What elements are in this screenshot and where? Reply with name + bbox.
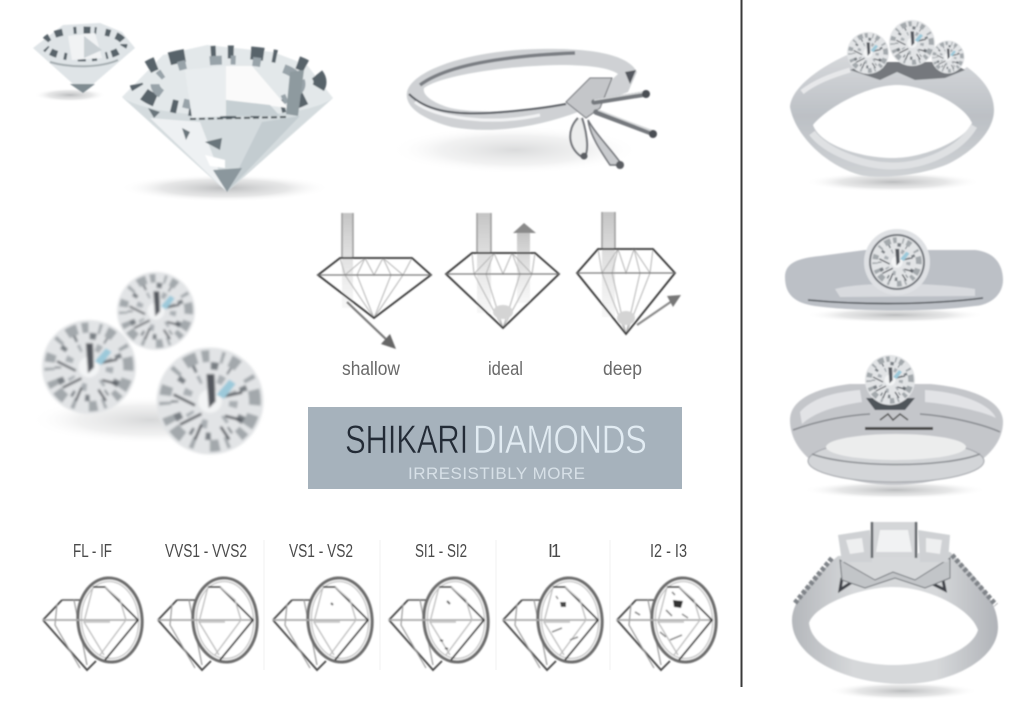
logo banner [308,407,682,489]
label: ideal: ideal [488,359,523,380]
engagement ring with empty setting [390,49,657,174]
clarity grade labels [73,541,687,561]
clarity grade labels: I2 - I3 [650,541,687,561]
logo banner: IRRESISTIBLY MORE [408,464,585,483]
clarity grade labels: FL - IF [73,541,112,561]
label: shallow: shallow [342,359,400,380]
clarity grade labels: I1 [548,541,561,561]
small diamond top left [33,23,135,102]
clarity diagrams row [43,540,719,670]
ring: three stone princess with channel band [792,522,998,700]
ring: bezel set [785,229,1003,323]
clarity grade labels: VVS1 - VVS2 [165,541,247,561]
vertical divider [740,0,742,687]
logo banner: SHIKARI [345,417,468,462]
diagram: deep cut [577,212,681,334]
label: deep: deep [603,359,642,380]
diagram: ideal cut [446,213,559,328]
three loose round diamonds [30,272,270,454]
diagram: shallow cut [318,213,431,349]
large diamond [120,45,333,202]
ring: three stone round [790,20,994,192]
clarity grade labels: SI1 - SI2 [415,541,467,561]
ring: solitaire with wedding band [790,355,1003,499]
logo banner: DIAMONDS [473,417,647,462]
clarity grade labels: VS1 - VS2 [289,541,353,561]
